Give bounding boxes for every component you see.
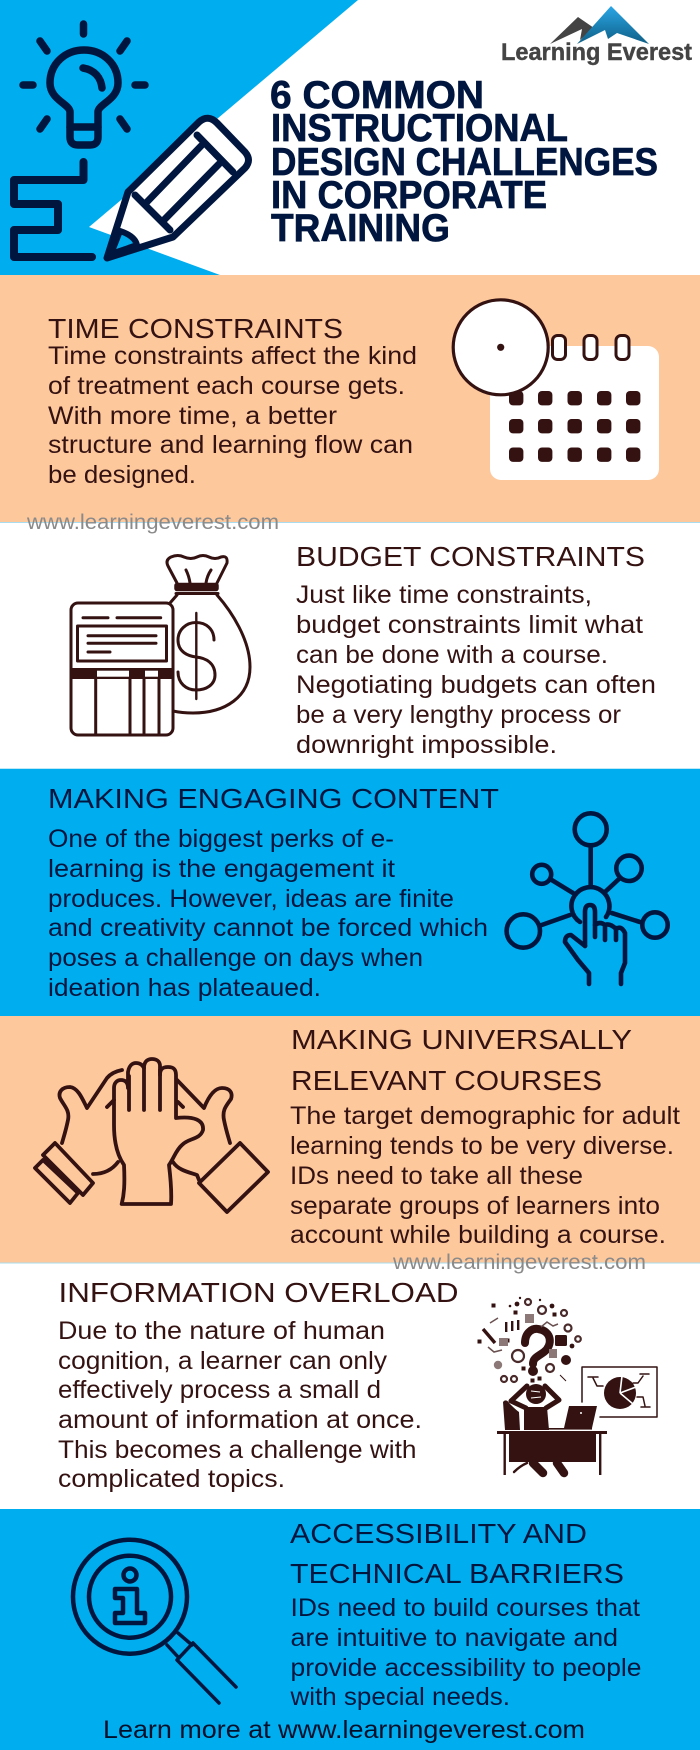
text: engaging content body: learning is the engagement it xyxy=(48,855,395,883)
heading: making engaging content: MAKING ENGAGING CONTENT xyxy=(48,783,499,814)
panel: budget constraints xyxy=(0,523,700,770)
panel: information overload xyxy=(0,1264,700,1510)
text: budget constraints body xyxy=(296,581,656,759)
title: INSTRUCTIONAL xyxy=(271,107,568,150)
text: information overload body: cognition, a learner can only xyxy=(58,1347,388,1375)
text: time constraints body: structure and learning flow can xyxy=(48,431,413,459)
text: accessibility body: are intuitive to navigate and xyxy=(290,1624,618,1652)
text: universally relevant body xyxy=(290,1102,680,1249)
text: universally relevant body: learning tends to be very diverse. xyxy=(290,1132,674,1160)
text: accessibility body: IDs need to build courses that xyxy=(290,1594,640,1622)
logo: Learning Everest xyxy=(501,6,692,66)
text: engaging content body: poses a challenge on days when xyxy=(48,944,423,972)
icon: light bulb xyxy=(23,24,145,145)
text: information overload body: This becomes a challenge with xyxy=(58,1436,416,1464)
icon: high five hands xyxy=(35,1059,268,1212)
title: IN CORPORATE xyxy=(271,174,547,217)
text: budget constraints body: can be done with a course. xyxy=(296,641,608,669)
heading: information overload: INFORMATION OVERLOAD xyxy=(58,1277,458,1308)
text: time constraints body: of treatment each course gets. xyxy=(48,372,405,400)
title xyxy=(270,74,658,250)
text: information overload body: amount of information at once. xyxy=(58,1406,422,1434)
watermark: website url left: www.learningeverest.com xyxy=(26,510,279,534)
text: universally relevant body: account while building a course. xyxy=(290,1221,666,1249)
panel: header xyxy=(0,0,700,275)
text: information overload body xyxy=(58,1317,422,1493)
watermark: website url right: www.learningeverest.com xyxy=(392,1250,646,1274)
text: universally relevant body: The target demographic for adult xyxy=(290,1102,680,1130)
text: information overload body: complicated topics. xyxy=(58,1465,285,1493)
icon: magnifying glass with info xyxy=(73,1540,236,1703)
text: time constraints body xyxy=(48,342,417,489)
icon: overwhelmed person at desk xyxy=(478,1297,657,1475)
text: accessibility body xyxy=(289,1594,642,1711)
text: information overload body: Due to the nature of human xyxy=(58,1317,385,1345)
text: engaging content body: One of the biggest perks of e- xyxy=(48,825,394,853)
icon: network with pointing hand xyxy=(507,813,668,984)
heading: making universally relevant courses xyxy=(291,1024,632,1096)
panel: time constraints xyxy=(0,275,700,523)
heading: making universally relevant courses: RELEVANT COURSES xyxy=(291,1065,602,1096)
text: budget constraints body: Just like time constraints, xyxy=(296,581,592,609)
icon: calendar and clock xyxy=(453,300,659,480)
text: accessibility body: with special needs. xyxy=(289,1683,510,1711)
text: engaging content body: produces. However, ideas are finite xyxy=(48,885,454,913)
icon: winding path xyxy=(14,162,92,257)
title: 6 COMMON xyxy=(270,74,484,117)
panel: making universally relevant courses xyxy=(0,1016,700,1264)
text: engaging content body: ideation has plateaued. xyxy=(48,974,321,1002)
panel: accessibility and technical barriers xyxy=(0,1509,700,1750)
text: budget constraints body: Negotiating budgets can often xyxy=(296,671,656,699)
text: budget constraints body: budget constraints limit what xyxy=(296,611,643,639)
text: time constraints body: Time constraints affect the kind xyxy=(48,342,417,370)
heading: accessibility and technical barriers: TECHNICAL BARRIERS xyxy=(290,1558,624,1589)
text: information overload body: effectively process a small d xyxy=(58,1376,381,1404)
text: universally relevant body: IDs need to take all these xyxy=(290,1162,583,1190)
footer call to action: Learn more at www.learningeverest.com xyxy=(103,1716,585,1744)
heading: budget constraints: BUDGET CONSTRAINTS xyxy=(296,541,645,572)
text: universally relevant body: separate groups of learners into xyxy=(290,1192,660,1220)
icon: pencil xyxy=(107,118,248,258)
text: time constraints body: With more time, a better xyxy=(48,402,337,430)
heading: making universally relevant courses: MAKING UNIVERSALLY xyxy=(291,1024,632,1055)
heading: accessibility and technical barriers: ACCESSIBILITY AND xyxy=(290,1518,587,1549)
heading: time constraints: TIME CONSTRAINTS xyxy=(48,313,343,344)
text: time constraints body: be designed. xyxy=(48,461,196,489)
panel: making engaging content xyxy=(0,769,700,1016)
text: budget constraints body: be a very lengthy process or xyxy=(296,701,621,729)
icon: question mark xyxy=(525,1329,550,1364)
title: TRAINING xyxy=(271,207,450,250)
text: engaging content body: and creativity cannot be forced which xyxy=(48,914,488,942)
title: DESIGN CHALLENGES xyxy=(271,141,658,184)
icon: money bag and invoice xyxy=(71,556,250,735)
logo: Learning Everest: Learning Everest xyxy=(501,39,692,66)
text: budget constraints body: downright impossible. xyxy=(296,731,557,759)
text: accessibility body: provide accessibility to people xyxy=(290,1654,642,1682)
text: engaging content body xyxy=(48,825,488,1002)
heading: accessibility and technical barriers xyxy=(290,1518,624,1589)
